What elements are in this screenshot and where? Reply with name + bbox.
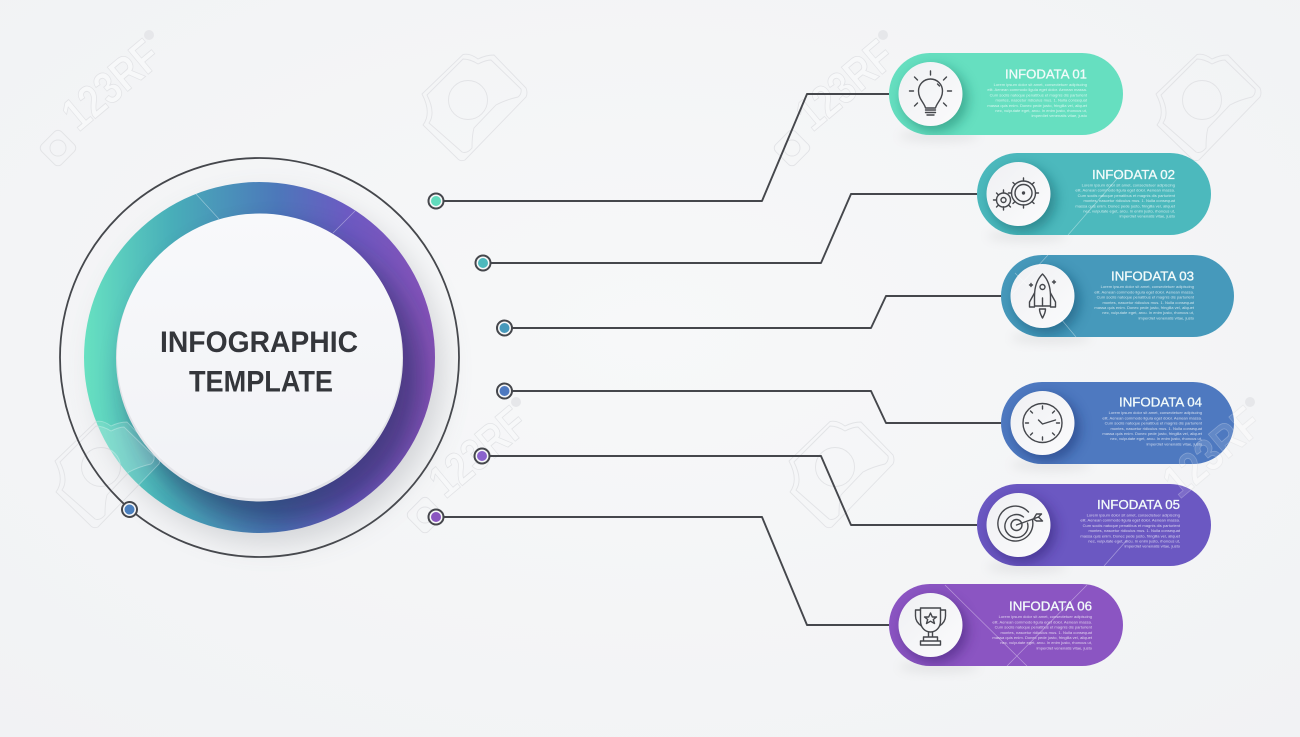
gradient ring — [84, 182, 435, 533]
panel: infodata 01: INFODATA 01 — [1005, 66, 1087, 81]
panel: infodata 04: montes, nascetur ridiculus mus. 1. Nulla consequat — [1110, 426, 1203, 431]
icon: clock — [1023, 404, 1062, 442]
watermark overlay on coloured shapes: 123RF — [1152, 396, 1271, 507]
dot 5 — [474, 448, 490, 464]
panel: infodata 01 — [889, 53, 1123, 142]
panel: infodata 06: elit. Aenean commodo ligula eget dolor. Aenean massa. — [992, 619, 1092, 624]
panel: infodata 02: Lorem ipsum dolor sit amet, consectetuer adipiscing — [1082, 182, 1175, 188]
central title — [160, 326, 358, 398]
orbit dot — [122, 502, 137, 517]
panel: infodata 02: Cum sociis natoque penatibus et magnis dis parturient — [1078, 193, 1176, 198]
panel: infodata 06: massa quis enim. Donec pede justo, fringilla vel, aliquet — [992, 635, 1093, 640]
icon: light bulb — [910, 71, 952, 115]
central diagram — [60, 158, 459, 557]
panel: infodata 04: INFODATA 04 — [1119, 395, 1202, 410]
outer orbit circle — [60, 158, 459, 557]
disc lip — [116, 214, 403, 502]
panel: infodata 02: montes, nascetur ridiculus mus. 1. Nulla consequat — [1083, 198, 1176, 203]
panel: infodata 04: Cum sociis natoque penatibus et magnis dis parturient — [1105, 421, 1203, 426]
panel: infodata 05: nec, vulputate eget, arcu. In enim justo, rhoncus ut, — [1088, 538, 1180, 544]
dot 6 — [428, 510, 444, 524]
panel: infodata 05: Cum sociis natoque penatibus et magnis dis parturient — [1083, 523, 1181, 528]
panel: infodata 04: massa quis enim. Donec pede justo, fringilla vel, aliquet — [1102, 431, 1203, 436]
panel: infodata 03: massa quis enim. Donec pede justo, fringilla vel, aliquet — [1094, 305, 1195, 310]
panel: infodata 05: INFODATA 05 — [1097, 497, 1180, 512]
panel: infodata 06: montes, nascetur ridiculus mus. 1. Nulla consequat — [1000, 630, 1093, 635]
panel: infodata 06: Cum sociis natoque penatibus et magnis dis parturient — [995, 625, 1093, 630]
panel: infodata 03: montes, nascetur ridiculus mus. 1. Nulla consequat — [1102, 300, 1195, 305]
connector lines — [443, 94, 1001, 625]
central disc — [117, 214, 402, 498]
panel: infodata 04: Lorem ipsum dolor sit amet, consectetuer adipiscing — [1109, 410, 1202, 415]
panel: infodata 06 — [889, 584, 1123, 673]
panel: infodata 04: imperdiet venenatis vitae, justo — [1146, 441, 1203, 446]
panel: infodata 02: imperdiet venenatis vitae, justo — [1119, 214, 1176, 219]
panel: infodata 06: nec, vulputate eget, arcu. In enim justo, rhoncus ut, — [1000, 640, 1092, 645]
ring drop shadow — [96, 196, 444, 544]
panel: infodata 03: imperdiet venenatis vitae, justo — [1138, 315, 1195, 320]
panel: infodata 03 — [1001, 255, 1234, 344]
watermark: logo text: 123RF — [418, 396, 537, 507]
dot 4 — [497, 384, 512, 398]
dot 3 — [497, 320, 512, 336]
panel: infodata 03: nec, vulputate eget, arcu. In enim justo, rhoncus ut, — [1102, 310, 1194, 315]
panel: infodata 06: Lorem ipsum dolor sit amet, consectetuer adipiscing — [999, 614, 1092, 619]
watermark: logo text — [38, 29, 1271, 535]
central title: INFOGRAPHIC — [160, 326, 358, 359]
panel: infodata 02: elit. Aenean commodo ligula eget dolor. Aenean massa. — [1075, 188, 1175, 193]
panel: infodata 02: nec, vulputate eget, arcu. In enim justo, rhoncus ut, — [1083, 208, 1175, 214]
panel: infodata 03: Cum sociis natoque penatibus et magnis dis parturient — [1097, 295, 1195, 300]
panel: infodata 05: elit. Aenean commodo ligula eget dolor. Aenean massa. — [1080, 518, 1180, 523]
watermark overlay on coloured shapes — [96, 405, 1256, 498]
icon: trophy — [916, 608, 946, 645]
panel: infodata 01: elit. Aenean commodo ligula eget dolor. Aenean massa. — [987, 87, 1087, 92]
panel: infodata 04 — [1001, 382, 1234, 471]
watermark: logo text: 123RF — [785, 29, 904, 140]
watermark: logo text: 123RF — [1152, 396, 1271, 507]
central title: TEMPLATE — [189, 366, 333, 398]
icon: target — [998, 506, 1042, 541]
panel: infodata 01: Lorem ipsum dolor sit amet, consectetuer adipiscing — [994, 82, 1087, 87]
icon: gears — [994, 178, 1038, 210]
panel: infodata 01: massa quis enim. Donec pede justo, fringilla vel, aliquet — [987, 103, 1088, 108]
panel: infodata 04: nec, vulputate eget, arcu. In enim justo, rhoncus ut, — [1110, 436, 1202, 441]
panel: infodata 02 — [977, 153, 1211, 242]
panel: infodata 05 — [977, 484, 1211, 573]
watermark: camera stamps — [55, 54, 1261, 528]
panel: infodata 06: INFODATA 06 — [1009, 599, 1092, 614]
panel: infodata 03: Lorem ipsum dolor sit amet, consectetuer adipiscing — [1101, 284, 1194, 289]
panel: infodata 01: montes, nascetur ridiculus mus. 1. Nulla consequat — [995, 98, 1088, 103]
inner disc shadow on ring — [129, 232, 421, 524]
panel: infodata 06: imperdiet venenatis vitae, justo — [1036, 645, 1093, 650]
panel: infodata 02: massa quis enim. Donec pede justo, fringilla vel, aliquet — [1075, 203, 1176, 208]
panel: infodata 01: Cum sociis natoque penatibus et magnis dis parturient — [990, 92, 1088, 97]
ring hairlines — [196, 194, 355, 233]
panel: infodata 01: nec, vulputate eget, arcu. In enim justo, rhoncus ut, — [995, 108, 1087, 113]
watermark: logo text: 123RF — [51, 29, 170, 140]
panel: infodata 02: INFODATA 02 — [1092, 167, 1175, 182]
panel: infodata 03: elit. Aenean commodo ligula eget dolor. Aenean massa. — [1094, 289, 1194, 294]
panel: infodata 05: imperdiet venenatis vitae, justo — [1124, 544, 1181, 549]
panel: infodata 05: Lorem ipsum dolor sit amet, consectetuer adipiscing — [1087, 512, 1180, 518]
panel: infodata 03: INFODATA 03 — [1111, 269, 1194, 284]
icon: rocket — [1030, 274, 1056, 318]
connector dots — [122, 194, 512, 524]
dot 2 — [476, 256, 490, 270]
panel: infodata 04: elit. Aenean commodo ligula eget dolor. Aenean massa. — [1102, 415, 1202, 420]
dot 1 — [428, 194, 444, 208]
panel: infodata 05: montes, nascetur ridiculus mus. 1. Nulla consequat — [1088, 528, 1181, 533]
panel: infodata 05: massa quis enim. Donec pede justo, fringilla vel, aliquet — [1080, 533, 1181, 538]
panel: infodata 01: imperdiet venenatis vitae, justo — [1031, 113, 1088, 118]
